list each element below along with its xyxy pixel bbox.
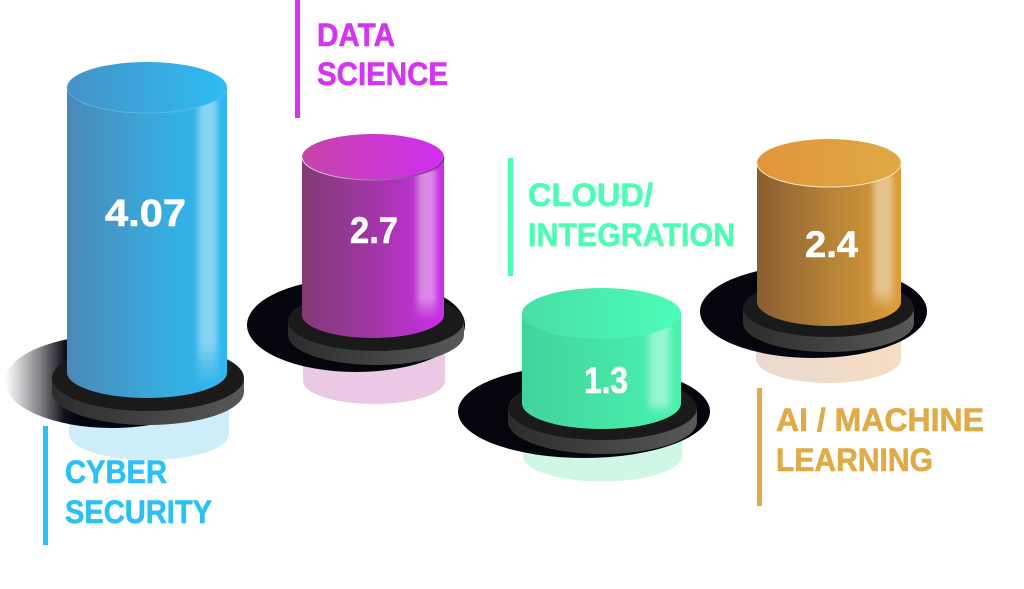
- floor shadow: data science: [247, 278, 465, 372]
- label: cyber security: [43, 426, 212, 545]
- label: ai machine learning: AI / MACHINE: [776, 402, 984, 438]
- value: 2.4: 2.4: [805, 224, 858, 265]
- reflection: data science: [303, 340, 445, 404]
- label: data science: SCIENCE: [317, 56, 448, 92]
- value: 1.3: 1.3: [584, 360, 628, 401]
- base disc: data science: [288, 291, 464, 365]
- cylinder body: ai machine learning: [757, 139, 901, 326]
- cylinder body: cyber security: [67, 62, 227, 398]
- base disc: ai machine learning: [743, 279, 914, 352]
- label: ai machine learning: [757, 388, 984, 506]
- cylinder: cyber security: [5, 62, 244, 460]
- value: 4.07: 4.07: [105, 193, 186, 235]
- floor shadow: cyber security: [5, 335, 219, 428]
- reflection: cyber security: [69, 380, 229, 460]
- floor shadow: cloud integration: [458, 365, 710, 458]
- cylinder body: data science: [302, 134, 444, 338]
- cylinder body: cloud integration: [522, 288, 681, 429]
- label: cyber security: CYBER: [65, 454, 167, 490]
- cylinder: data science: [247, 134, 465, 404]
- base disc: cloud integration: [508, 376, 697, 454]
- label: cloud integration: INTEGRATION: [528, 217, 735, 253]
- value: 2.7: 2.7: [350, 210, 398, 251]
- base disc: cyber security: [52, 345, 244, 425]
- label: data science: [295, 0, 448, 118]
- floor shadow: ai machine learning: [700, 265, 927, 358]
- cylinder: ai machine learning: [700, 139, 927, 383]
- reflection: cloud integration: [523, 430, 682, 482]
- label: cyber security: SECURITY: [65, 494, 212, 530]
- cylinder: cloud integration: [458, 288, 710, 482]
- label: data science: DATA: [317, 17, 395, 53]
- label: ai machine learning: LEARNING: [776, 442, 933, 478]
- reflection: ai machine learning: [756, 330, 901, 383]
- label: cloud integration: [508, 158, 735, 276]
- label: cloud integration: CLOUD/: [528, 177, 653, 213]
